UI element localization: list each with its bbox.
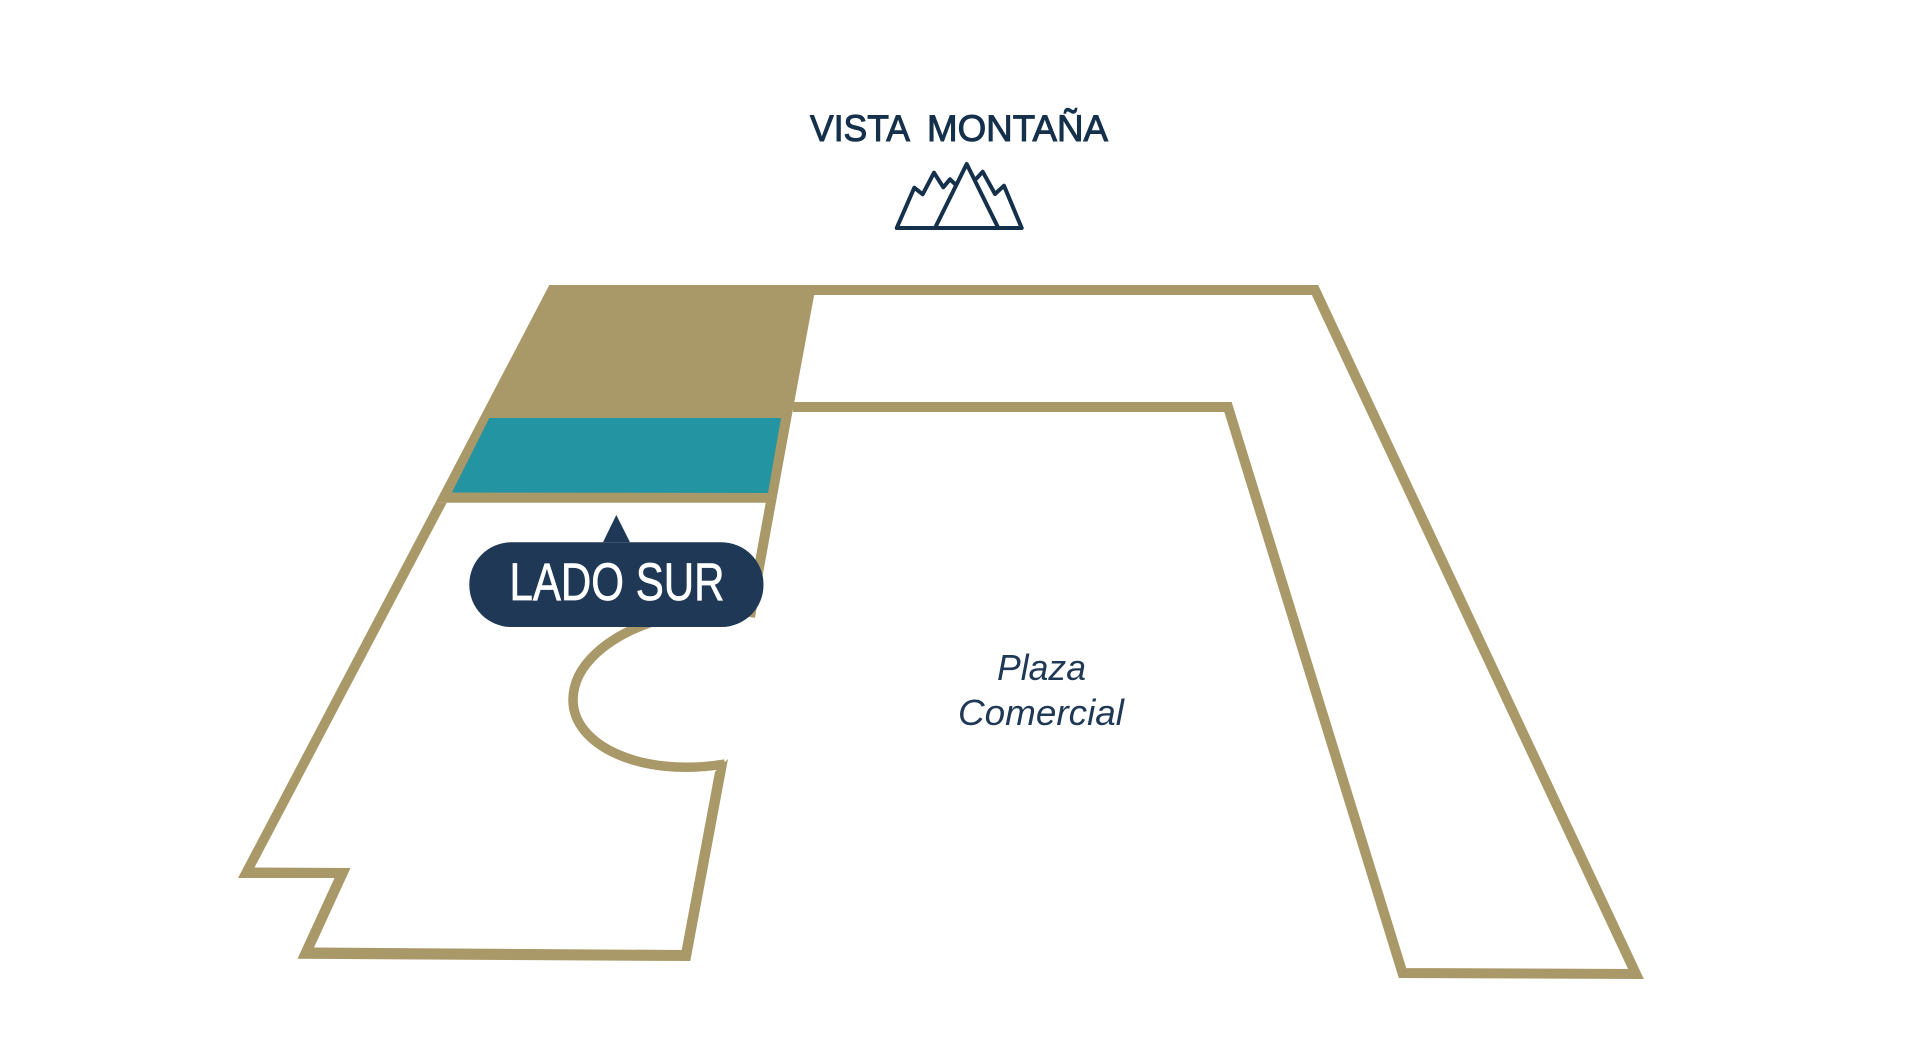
callout: lado sur <box>469 515 764 627</box>
heading: vista montaña: VISTA <box>810 108 910 149</box>
heading: vista montaña: MONTAÑA <box>927 108 1108 149</box>
building outline: left wing <box>238 290 810 961</box>
building outline: right wing <box>793 290 1636 974</box>
heading: vista montaña <box>810 108 1108 149</box>
label: plaza comercial: Comercial <box>958 692 1125 733</box>
label: plaza comercial: Plaza <box>997 647 1086 688</box>
gold block: upper levels <box>435 285 816 503</box>
icon: mountains <box>897 164 1022 228</box>
callout: lado sur: LADO SUR <box>510 553 724 612</box>
label: plaza comercial <box>958 647 1125 733</box>
teal block: lado sur highlight <box>452 418 781 493</box>
